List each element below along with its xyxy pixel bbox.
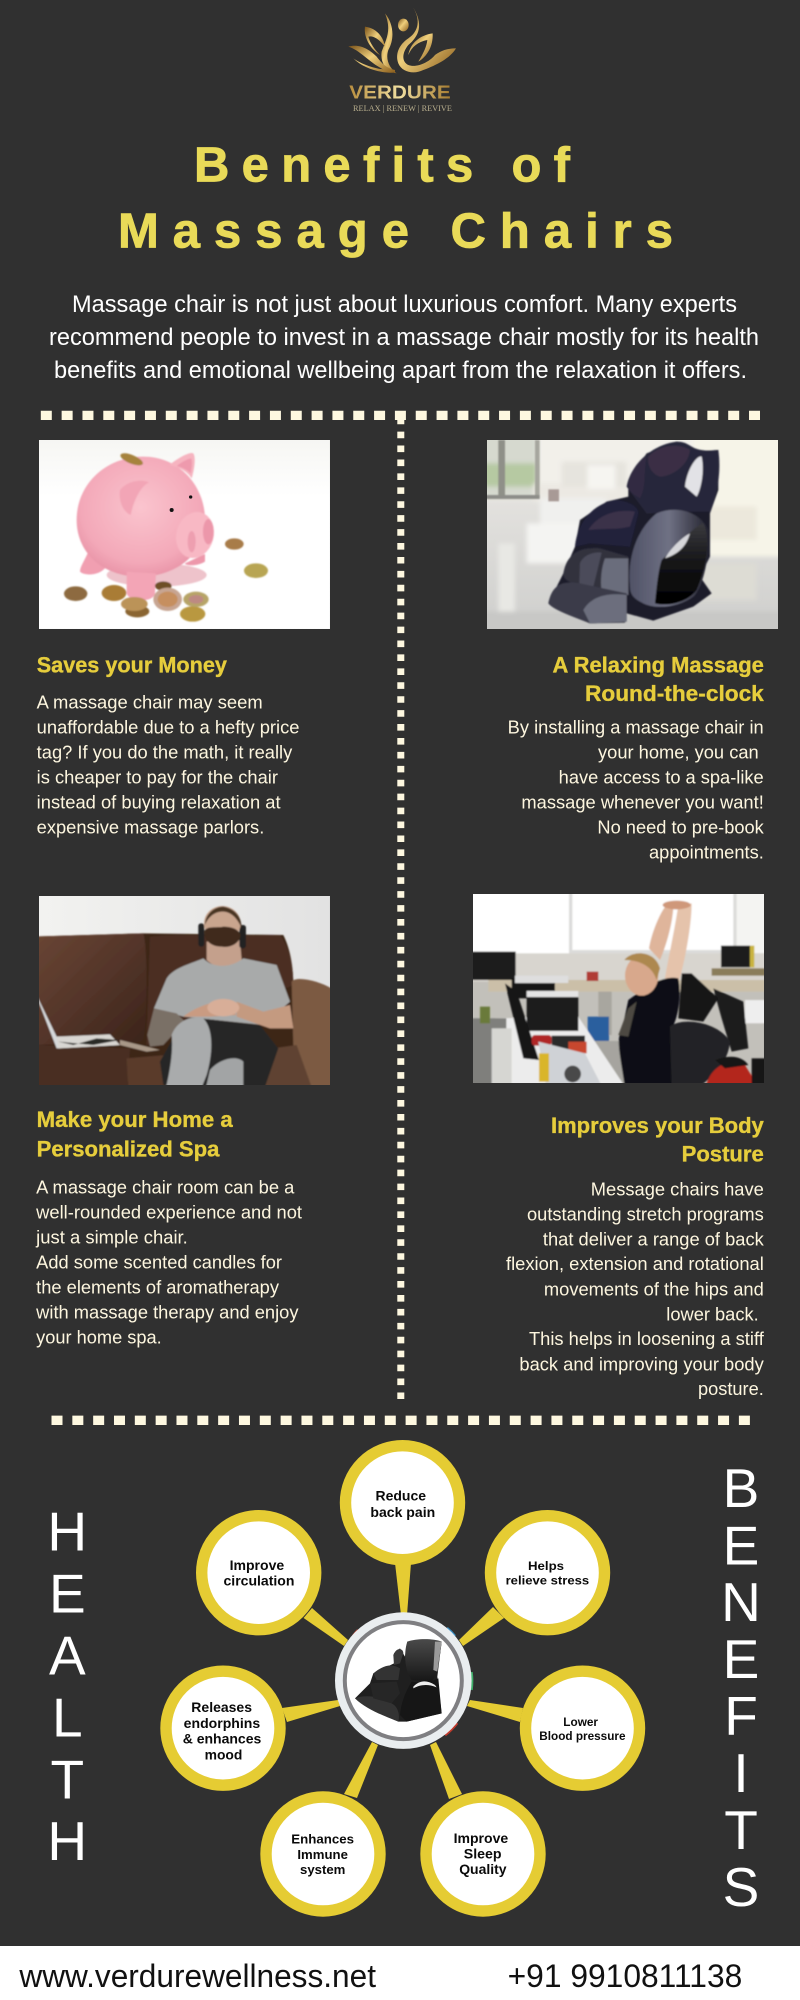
vertical word: HEALTH <box>47 1501 87 1872</box>
logo wordmark: VERDURE <box>349 83 451 103</box>
body text <box>508 718 765 863</box>
center hub: massage chair icon <box>335 1612 472 1749</box>
bubble: helps relieve stress: Helps <box>528 1559 564 1573</box>
body text: the elements of aromatherapy <box>36 1277 279 1297</box>
heading: Round-the-clock <box>585 681 765 706</box>
bubble: releases endorphins: Releases <box>191 1699 252 1715</box>
heading: Improves your Body <box>551 1113 765 1138</box>
body text: This helps in loosening a stiff <box>529 1329 765 1349</box>
bubble: lower blood pressure: Blood pressure <box>539 1731 626 1743</box>
vertical word: BENEFITS: I <box>733 1742 749 1804</box>
vertical word: HEALTH: L <box>52 1686 83 1748</box>
heading: Saves your Money <box>37 653 228 678</box>
bubble: releases endorphins: endorphins <box>184 1715 260 1731</box>
body text: unaffordable due to a hefty price <box>37 718 299 738</box>
photo: massage chair in living room <box>487 440 778 629</box>
heading <box>552 652 765 706</box>
logo: Verdure <box>348 5 456 113</box>
body text: Message chairs have <box>591 1179 764 1199</box>
vertical word: HEALTH: E <box>49 1562 86 1624</box>
body text <box>506 1179 765 1399</box>
bubble: releases endorphins: mood <box>205 1747 242 1763</box>
bubble: reduce back pain: Reduce <box>376 1488 426 1504</box>
body text: that deliver a range of back <box>543 1229 765 1249</box>
vertical word: BENEFITS: N <box>721 1571 761 1633</box>
heading: Posture <box>682 1142 764 1167</box>
bubble: improve circulation: circulation <box>224 1572 294 1588</box>
body text: with massage therapy and enjoy <box>35 1302 298 1322</box>
body text: is cheaper to pay for the chair <box>37 768 278 788</box>
vertical word: BENEFITS: B <box>723 1457 759 1519</box>
vertical word: BENEFITS <box>721 1457 761 1918</box>
panel: personalized spa <box>32 896 337 1347</box>
body text <box>37 693 299 838</box>
body text <box>35 1177 302 1347</box>
bubble: enhances immune system: Enhances <box>291 1832 354 1847</box>
body text: By installing a massage chair in <box>508 718 764 738</box>
footer bar <box>0 1946 800 2000</box>
body text: flexion, extension and rotational <box>506 1254 764 1274</box>
bubble: improve sleep quality: Sleep <box>464 1845 502 1861</box>
vertical word: HEALTH: T <box>50 1748 84 1810</box>
body text: appointments. <box>649 843 764 863</box>
bubble: releases endorphins: & enhances <box>183 1731 262 1747</box>
bubble: reduce back pain: back pain <box>370 1504 435 1520</box>
phone: +91 9910811138 <box>508 1958 742 1994</box>
title <box>118 139 673 258</box>
heading: Make your Home a <box>37 1107 233 1132</box>
bubble: improve circulation: Improve <box>230 1557 284 1573</box>
vertical word: HEALTH: H <box>47 1810 87 1872</box>
vertical word: HEALTH: H <box>47 1501 87 1563</box>
bubble: improve sleep quality: Improve <box>454 1830 508 1846</box>
website: www.verdurewellness.net <box>18 1958 376 1994</box>
bubble: lower blood pressure: Lower <box>563 1717 599 1729</box>
connector spokes <box>282 1563 523 1799</box>
title: Massage Chairs <box>118 204 673 258</box>
intro paragraph: benefits and emotional wellbeing apart from the relaxation it offers. <box>54 357 747 384</box>
body text: A massage chair room can be a <box>36 1177 295 1197</box>
heading <box>551 1113 765 1167</box>
body text: movements of the hips and <box>544 1279 764 1299</box>
vertical word: BENEFITS: S <box>723 1856 759 1918</box>
intro paragraph: Massage chair is not just about luxurious comfort. Many experts <box>72 291 737 318</box>
body text: posture. <box>698 1379 764 1399</box>
heading: Personalized Spa <box>37 1136 220 1162</box>
title: Benefits of <box>194 139 571 193</box>
vertical word: BENEFITS: E <box>723 1514 759 1576</box>
heading: A Relaxing Massage <box>552 652 764 677</box>
photo: piggy bank with coins <box>39 440 330 629</box>
body text: tag? If you do the math, it really <box>37 743 292 763</box>
bubble: improve sleep quality: Quality <box>459 1861 507 1877</box>
body text: instead of buying relaxation at <box>37 793 281 813</box>
bubble: improve sleep quality <box>426 1797 540 1911</box>
body text: your home spa. <box>36 1327 162 1347</box>
intro paragraph <box>49 291 759 384</box>
radial diagram: health benefits <box>166 1446 640 1911</box>
bubble: helps relieve stress <box>490 1516 604 1630</box>
logo tagline: RELAX | RENEW | REVIVE <box>353 104 452 113</box>
vertical word: HEALTH: A <box>49 1624 86 1686</box>
bubble: lower blood pressure <box>526 1671 640 1785</box>
vertical word: BENEFITS: F <box>724 1685 758 1747</box>
logo mark: lotus figure <box>348 5 456 73</box>
body text: Add some scented candles for <box>36 1252 282 1272</box>
bubble: helps relieve stress: relieve stress <box>506 1574 590 1588</box>
photo: man relaxing on leather sofa <box>32 896 337 1092</box>
panel: improves body posture <box>467 888 772 1399</box>
vertical word: BENEFITS: E <box>723 1628 759 1690</box>
body text: No need to pre-book <box>597 818 765 838</box>
body text: massage whenever you want! <box>521 793 764 813</box>
panel: relaxing massage round-the-clock <box>480 433 787 863</box>
body text: just a simple chair. <box>35 1227 188 1247</box>
panel: saves your money <box>37 440 330 838</box>
body text: outstanding stretch programs <box>527 1204 764 1224</box>
bubble: enhances immune system: Immune <box>297 1847 348 1862</box>
body text: A massage chair may seem <box>37 693 263 713</box>
intro paragraph: recommend people to invest in a massage chair mostly for its health <box>49 324 759 351</box>
heading <box>37 1107 233 1162</box>
body text: expensive massage parlors. <box>37 818 264 838</box>
body text: lower back. <box>666 1304 759 1324</box>
bubble: improve circulation <box>202 1516 316 1630</box>
body text: back and improving your body <box>519 1354 764 1374</box>
photo: man stretching at office desk <box>473 894 764 1083</box>
body text: your home, you can <box>598 743 759 763</box>
vertical word: BENEFITS: T <box>724 1799 758 1861</box>
body text: have access to a spa-like <box>559 768 764 788</box>
bubble: reduce back pain <box>346 1446 460 1560</box>
bubble: enhances immune system: system <box>300 1862 345 1877</box>
bubble: enhances immune system <box>266 1797 380 1911</box>
bubble: releases endorphins <box>166 1671 280 1785</box>
body text: well-rounded experience and not <box>35 1202 302 1222</box>
